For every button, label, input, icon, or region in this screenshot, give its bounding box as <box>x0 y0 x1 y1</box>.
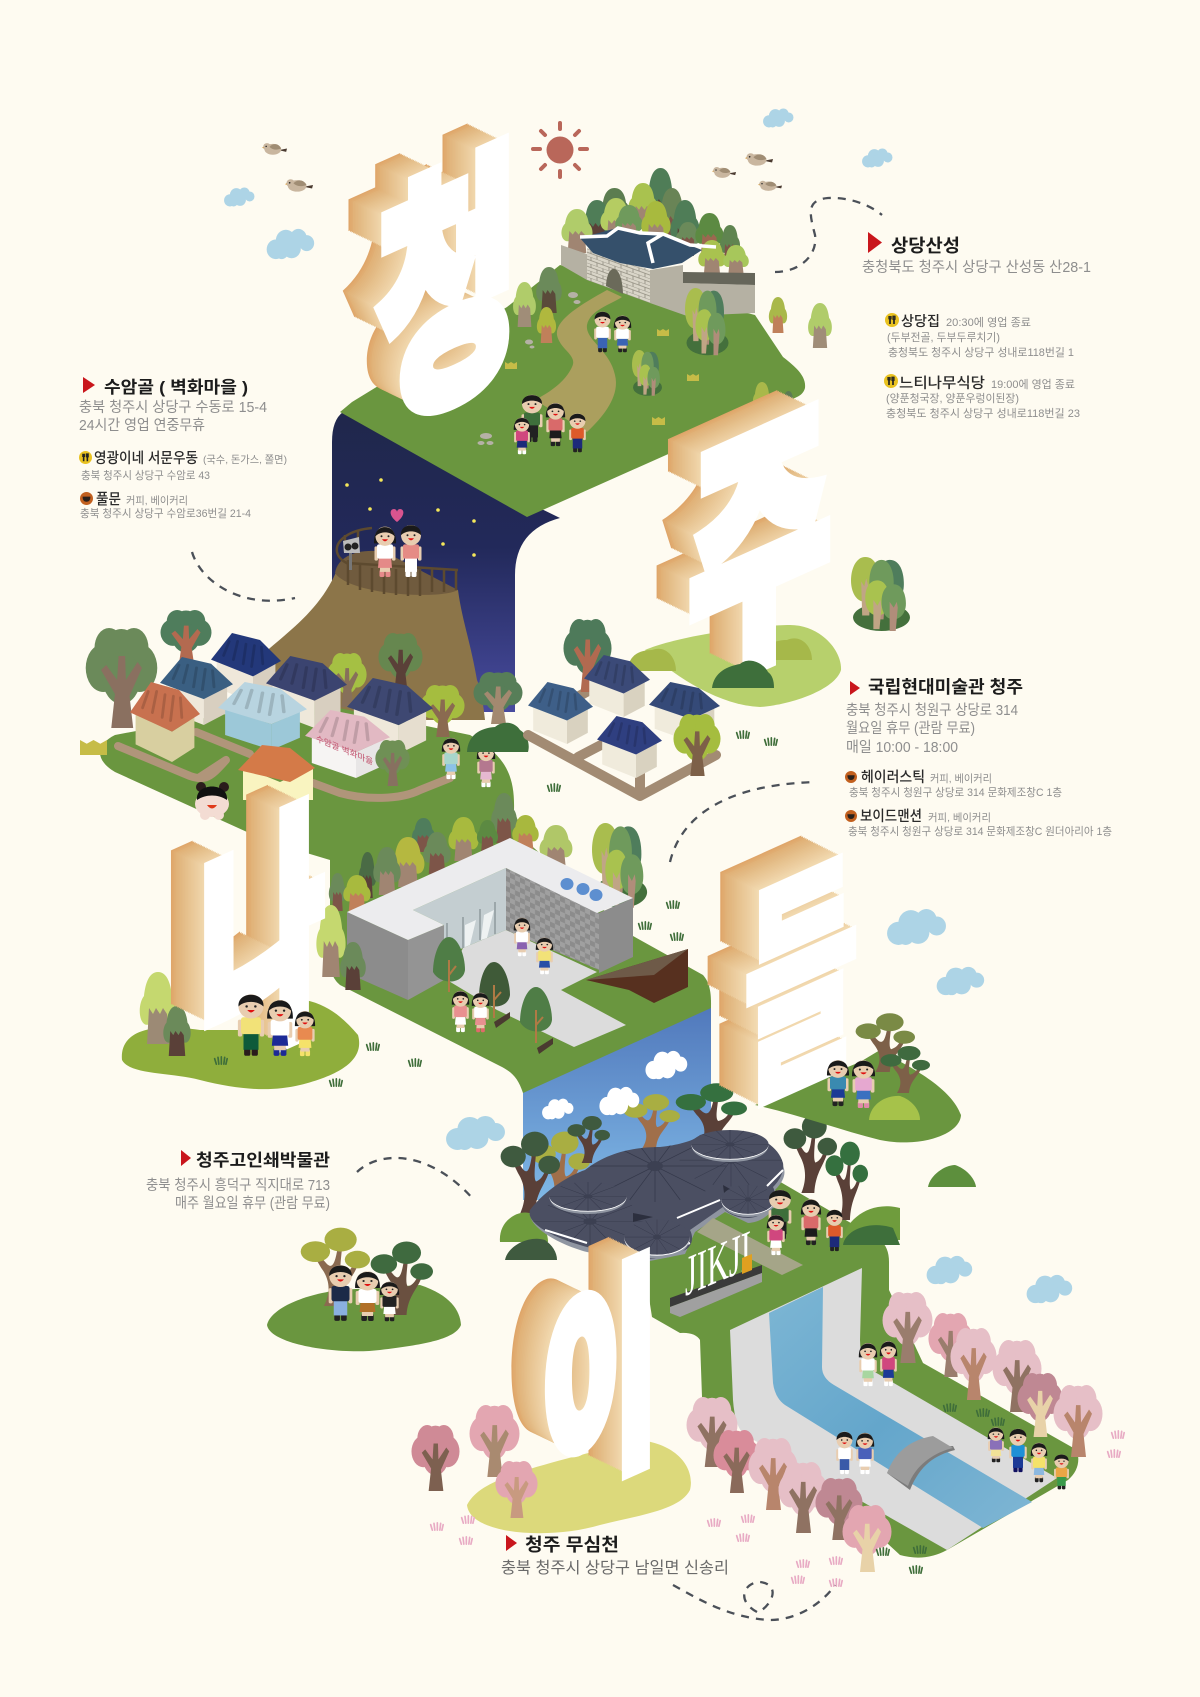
pink trees: along the stream <box>883 1292 1102 1457</box>
title letter: 청: 청 <box>376 55 519 487</box>
tree and figures: lower village <box>375 738 495 787</box>
village paths <box>118 732 450 798</box>
panel: observatory hill <box>262 528 485 720</box>
bush at foot of 주 <box>712 661 774 688</box>
JIKJI sign <box>670 1218 762 1317</box>
trees on 나 ground <box>140 972 191 1056</box>
clouds: pale blue decorative clouds <box>224 109 1072 1303</box>
label: 청주고인쇄박물관: 충북 청주시 흥덕구 직지대로 713 <box>146 1176 330 1194</box>
shop: 느티나무식당: 느티나무식당 <box>899 375 985 392</box>
pine trees on 들 ground <box>856 1013 930 1120</box>
white clouds in sky panel <box>542 1051 687 1119</box>
shop: 상당집: 상당집 <box>901 313 940 329</box>
binocular viewer <box>343 537 360 570</box>
family on 들 ground <box>827 1060 875 1108</box>
printing museum domed roofs <box>530 1130 784 1263</box>
figures on hilltop <box>514 312 631 454</box>
trees: behind the village <box>86 610 522 737</box>
shop: 느티나무식당: 충청북도 청주시 상당구 성내로118번길 23 <box>886 407 1080 420</box>
gravel walkway <box>697 1218 803 1275</box>
tree cluster: right of 주 <box>851 557 910 631</box>
right village: houses <box>528 655 721 778</box>
shop: 느티나무식당 <box>884 374 1080 420</box>
shop: 보이드맨션 <box>845 808 1112 838</box>
shop: 풀문: 커피, 베이커리 <box>126 495 188 507</box>
winding hill path <box>535 290 622 432</box>
title letter: 주: 주 <box>688 306 832 748</box>
label: 국립현대미술관 청주 <box>845 677 1112 838</box>
shop: 헤이러스틱: 헤이러스틱 <box>861 769 925 786</box>
couple on hill <box>374 525 422 577</box>
label: 수암골: 충북 청주시 상당구 수동로 15-4 <box>79 399 267 416</box>
stones on hilltop <box>478 292 580 445</box>
icon: heart <box>391 509 403 522</box>
label: 상당산성: 충청북도 청주시 상당구 산성동 산28-1 <box>862 259 1091 276</box>
shop: 상당집: (두부전골, 두부두루치기) <box>887 331 1000 344</box>
shop: 상당집 <box>885 313 1074 359</box>
stars in night sky <box>345 478 476 557</box>
shop: 풀문: 풀문 <box>96 491 121 508</box>
pink trees: lower stream bank <box>687 1397 892 1572</box>
title letter: 이: 이 <box>541 1179 659 1554</box>
shop: 보이드맨션: 보이드맨션 <box>860 808 922 825</box>
bush: beside hill <box>467 723 529 752</box>
panel: 나 ground <box>122 1000 359 1089</box>
label: 청주고인쇄박물관: 청주고인쇄박물관 <box>196 1151 330 1170</box>
trees: behind modern art museum <box>316 793 647 977</box>
panel: yellow-green ground under 이 <box>467 1440 691 1533</box>
family on 나 ground <box>238 994 315 1056</box>
yellow grass tufts on hilltop <box>505 329 745 426</box>
label: 상당산성 <box>862 232 1091 420</box>
figures at museum <box>452 918 553 1032</box>
pine trees: behind printing museum <box>501 1083 868 1220</box>
right village: trees and bushes <box>563 619 812 692</box>
label: 수암골 <box>79 377 287 520</box>
label: 청주 무심천: 충북 청주시 상당구 남일면 신송리 <box>501 1559 729 1577</box>
top island: green hilltop <box>340 265 805 517</box>
modern art museum building <box>347 838 633 1047</box>
girl peeking over 나 <box>195 782 229 820</box>
trees on hilltop <box>513 267 832 418</box>
label: 청주 무심천 <box>501 1535 729 1577</box>
label: 청주 무심천: 청주 무심천 <box>525 1535 619 1555</box>
green grass tufts <box>215 731 1004 1573</box>
skylights <box>560 878 602 901</box>
shop: 느티나무식당: 19:00에 영업 종료 <box>991 378 1075 391</box>
shop: 보이드맨션: 충북 청주시 청원구 상당로 314 문화제조창C 원더아리아 1층 <box>848 825 1112 838</box>
shop: 헤이러스틱: 커피, 베이커리 <box>930 773 992 785</box>
icon: birds <box>262 143 782 192</box>
panel: green ground under printing museum and stream <box>640 1180 1078 1558</box>
label: 국립현대미술관 청주: 매일 10:00 - 18:00 <box>846 739 958 756</box>
shop: 영광이네 서문우동: 영광이네 서문우동 <box>94 450 198 467</box>
stone bridge <box>887 1436 955 1490</box>
panel: village and museum green ground <box>100 700 711 1093</box>
bushes: beside printing museum <box>500 1165 976 1260</box>
pink tree in front of 이 <box>495 1461 538 1518</box>
pine trees on printing museum ground <box>301 1228 433 1315</box>
stream water <box>769 1287 1032 1528</box>
forest behind the fortress <box>561 168 749 276</box>
JIKJI sign: JIKJI <box>685 1218 751 1309</box>
mural village pink house with sign <box>305 710 390 778</box>
shop: 상당집: 20:30에 영업 종료 <box>946 316 1031 329</box>
shop: 헤이러스틱: 충북 청주시 청원구 상당로 314 문화제조창C 1층 <box>849 786 1062 799</box>
panel: 들 ground <box>755 1050 961 1142</box>
houses: left village <box>130 633 433 778</box>
panel: sky backdrop of printing museum <box>523 1000 711 1200</box>
dark brown sculpture near museum <box>586 949 688 1003</box>
label: 청주고인쇄박물관 <box>146 1150 330 1212</box>
hill plateau with railing <box>335 528 458 596</box>
figures at printing museum <box>767 1190 843 1255</box>
panel: light green ground under 주 <box>645 625 841 707</box>
shop: 풀문: 충북 청주시 상당구 수암로36번길 21-4 <box>80 507 251 520</box>
shop: 풀문 <box>80 491 251 520</box>
illustrated map scene behind the title letters <box>79 108 1125 1622</box>
label: 국립현대미술관 청주: 국립현대미술관 청주 <box>868 677 1023 697</box>
label: 수암골: 24시간 영업 연중무휴 <box>79 417 205 434</box>
label: 수암골: 수암골 ( 벽화마을 ) <box>104 378 248 397</box>
Sangdang fortress gate and walls <box>561 228 755 316</box>
title letter: 들: 들 <box>743 773 859 1160</box>
shop: 영광이네 서문우동 <box>79 450 287 482</box>
shop: 느티나무식당: (양푼청국장, 양푼우렁이된장) <box>886 392 1019 405</box>
panel: printing museum ground <box>267 1285 461 1351</box>
mural village pink house with sign: 수암골 벽화마을 <box>316 732 373 767</box>
label: 청주고인쇄박물관: 매주 월요일 휴무 (관람 무료) <box>175 1195 330 1212</box>
title letter: 나: 나 <box>200 716 324 1130</box>
icon: sun <box>533 123 587 177</box>
yellow grass beside the village <box>80 740 107 755</box>
shop: 영광이네 서문우동: 충북 청주시 상당구 수암로 43 <box>81 469 210 482</box>
pink grass tufts <box>431 1431 1124 1586</box>
pink trees: left of 이 <box>411 1405 519 1491</box>
panel: night sky behind observatory hill <box>332 412 560 712</box>
trees and benches: museum plaza <box>340 937 553 1054</box>
shop: 헤이러스틱 <box>845 769 1062 799</box>
shop: 상당집: 충청북도 청주시 상당구 성내로118번길 1 <box>888 346 1074 359</box>
dashed route lines <box>192 198 882 1620</box>
stream road <box>730 1268 1057 1550</box>
label: 국립현대미술관 청주: 월요일 휴무 (관람 무료) <box>846 720 975 737</box>
shop: 영광이네 서문우동: (국수, 돈가스, 쫄면) <box>203 454 287 466</box>
figures on printing museum ground <box>329 1265 399 1321</box>
label: 상당산성: 상당산성 <box>891 236 960 256</box>
figures by the stream <box>836 1341 1069 1489</box>
shop: 보이드맨션: 커피, 베이커리 <box>928 812 991 824</box>
label: 국립현대미술관 청주: 충북 청주시 청원구 상당로 314 <box>846 702 1018 719</box>
right village: path <box>528 690 716 796</box>
orange-roofed tower house behind 나 <box>238 745 315 800</box>
